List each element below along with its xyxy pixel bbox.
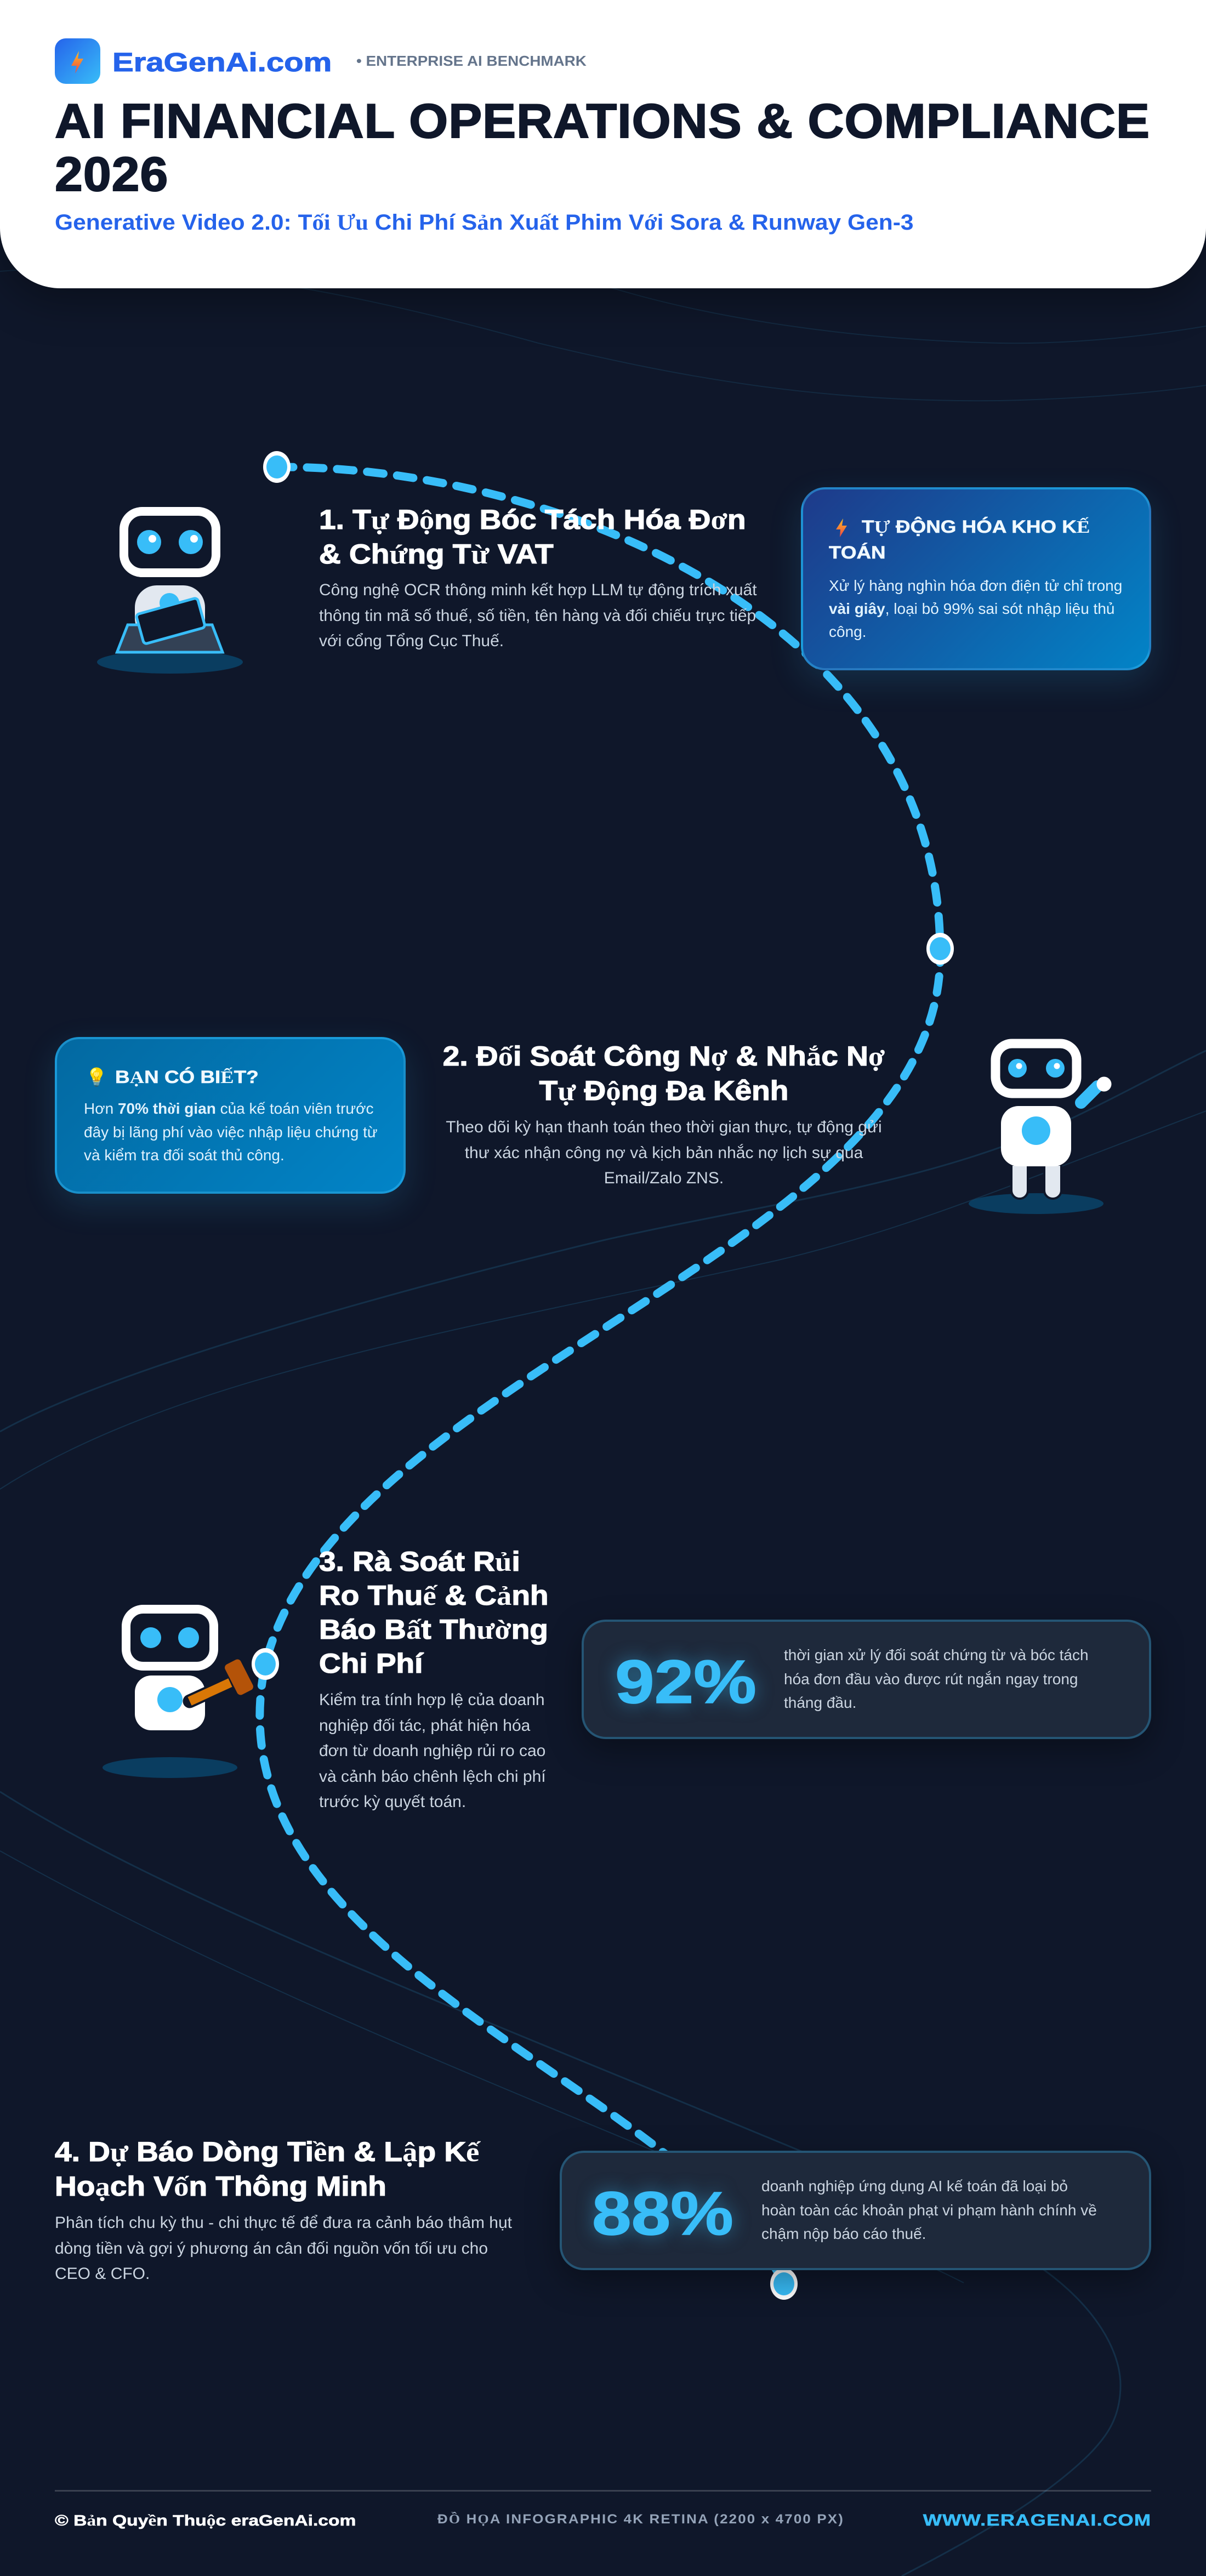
stat card: 88% [560,2151,1151,2270]
robot 3: hammer [103,1605,253,1778]
callout text: vài giây, loại bỏ 99% sai sót nhập liệu thủ [829,600,1114,617]
callout text [829,577,1122,640]
step 1 text: với cổng Tổng Cục Thuế. [319,632,504,650]
step 2 text: Theo dõi kỳ hạn thanh toán theo thời gian thực, tự động gửi [446,1118,882,1136]
step 1 text [319,581,757,650]
step 4 text [55,2210,512,2287]
path marker: step 3 [252,1648,279,1680]
footer [55,2490,1151,2557]
callout text: Xử lý hàng nghìn hóa đơn điện tử chỉ trong [829,577,1122,594]
stat number: 92% [615,1648,756,1716]
step 2 heading: 2. Đối Soát Công Nợ & Nhắc Nợ [443,1041,885,1072]
callout text: công. [829,623,866,640]
callout text: đây bị lãng phí vào việc nhập liệu chứng từ [84,1124,378,1141]
robot 1: laptop [97,507,243,674]
header panel [0,0,1206,288]
step 4 heading: 4. Dự Báo Dòng Tiền & Lập Kế [55,2136,479,2167]
step 4 text: Phân tích chu kỳ thu - chi thực tế để đưa ra cảnh báo thâm hụt [55,2214,512,2232]
stat text: hóa đơn đầu vào được rút ngắn ngay trong [784,1671,1078,1687]
callout text [84,1100,378,1164]
step 1 text: Công nghệ OCR thông minh kết hợp LLM tự động trích xuất [319,581,757,599]
robot 2: waving [969,1039,1112,1214]
stat card: 92% [582,1620,1151,1739]
step 4 heading [55,2135,479,2204]
subtitle: Generative Video 2.0: Tối Ưu Chi Phí Sản Xuất Phim Với Sora & Runway Gen-3 [55,210,914,235]
icon: light bulb: 💡 [86,1067,107,1087]
step 2 text: Email/Zalo ZNS. [604,1169,724,1187]
step 1 heading: & Chứng Từ VAT [319,539,554,569]
stat text: thời gian xử lý đối soát chứng từ và bóc tách [784,1646,1089,1663]
step 3 heading: 3. Rà Soát Rủi [319,1546,520,1577]
stat text [761,2174,1097,2246]
step 3 heading: Chi Phí [319,1648,423,1679]
stat text [784,1646,1089,1711]
logo text: EraGenAi.com [112,48,332,77]
step 3 text: trước kỳ quyết toán. [319,1793,466,1811]
title [55,94,1150,201]
footer note: ĐỒ HỌA INFOGRAPHIC 4K RETINA (2200 x 4700 PX) [437,2512,844,2527]
title: AI FINANCIAL OPERATIONS & COMPLIANCE [55,94,1150,148]
step 3 text: nghiệp đối tác, phát hiện hóa [319,1717,530,1734]
step 4 text: dòng tiền và gợi ý phương án cân đối nguồn vốn tối ưu cho [55,2239,488,2257]
step 3 heading: Ro Thuế & Cảnh [319,1580,549,1611]
step 3 text: và cảnh báo chênh lệch chi phí [319,1767,546,1786]
icon: lightning bolt [836,518,847,537]
stat text: tháng đầu. [784,1694,856,1711]
callout text: và kiểm tra đối soát thủ công. [84,1147,285,1164]
stat text: doanh nghiệp ứng dụng AI kế toán đã loại bỏ [761,2178,1068,2195]
step 3 text: đơn từ doanh nghiệp rủi ro cao [319,1742,545,1760]
website: WWW.ERAGENAI.COM [923,2511,1151,2529]
step 1 heading [319,504,746,569]
step 2 heading: Tự Động Đa Kênh [539,1075,788,1106]
stat text: hoàn toàn các khoản phạt vi phạm hành chính về [761,2201,1097,2219]
step 3 heading: Báo Bất Thường [319,1614,548,1645]
callout: did you know [55,1037,406,1194]
step 1 heading: 1. Tự Động Bóc Tách Hóa Đơn [319,504,746,535]
step 1 text: thông tin mã số thuế, số tiền, tên hàng và đối chiếu trực tiếp [319,606,756,625]
step 2 heading [443,1041,885,1106]
stat text: chậm nộp báo cáo thuế. [761,2225,926,2242]
step 2 text: thư xác nhận công nợ và kịch bản nhắc nợ lịch sự qua [465,1143,863,1162]
callout title: BẠN CÓ BIẾT? [115,1067,259,1087]
callout title: TỰ ĐỘNG HÓA KHO KẾ [862,517,1090,537]
copyright: © Bản Quyền Thuộc eraGenAi.com [55,2512,356,2529]
tagline: • ENTERPRISE AI BENCHMARK [356,53,587,69]
step 4 text: CEO & CFO. [55,2265,150,2283]
title: 2026 [55,147,168,201]
callout title second line: TOÁN [829,543,886,562]
logo icon [55,38,100,84]
stat number: 88% [592,2179,733,2248]
callout: automation [801,487,1151,670]
step 3 heading [319,1546,549,1679]
callout text: Hơn 70% thời gian của kế toán viên trước [84,1100,374,1118]
step 3 text [319,1691,546,1811]
step 4 heading: Hoạch Vốn Thông Minh [55,2171,386,2202]
step 3 text: Kiểm tra tính hợp lệ của doanh [319,1691,545,1709]
step 2 text [446,1118,882,1187]
